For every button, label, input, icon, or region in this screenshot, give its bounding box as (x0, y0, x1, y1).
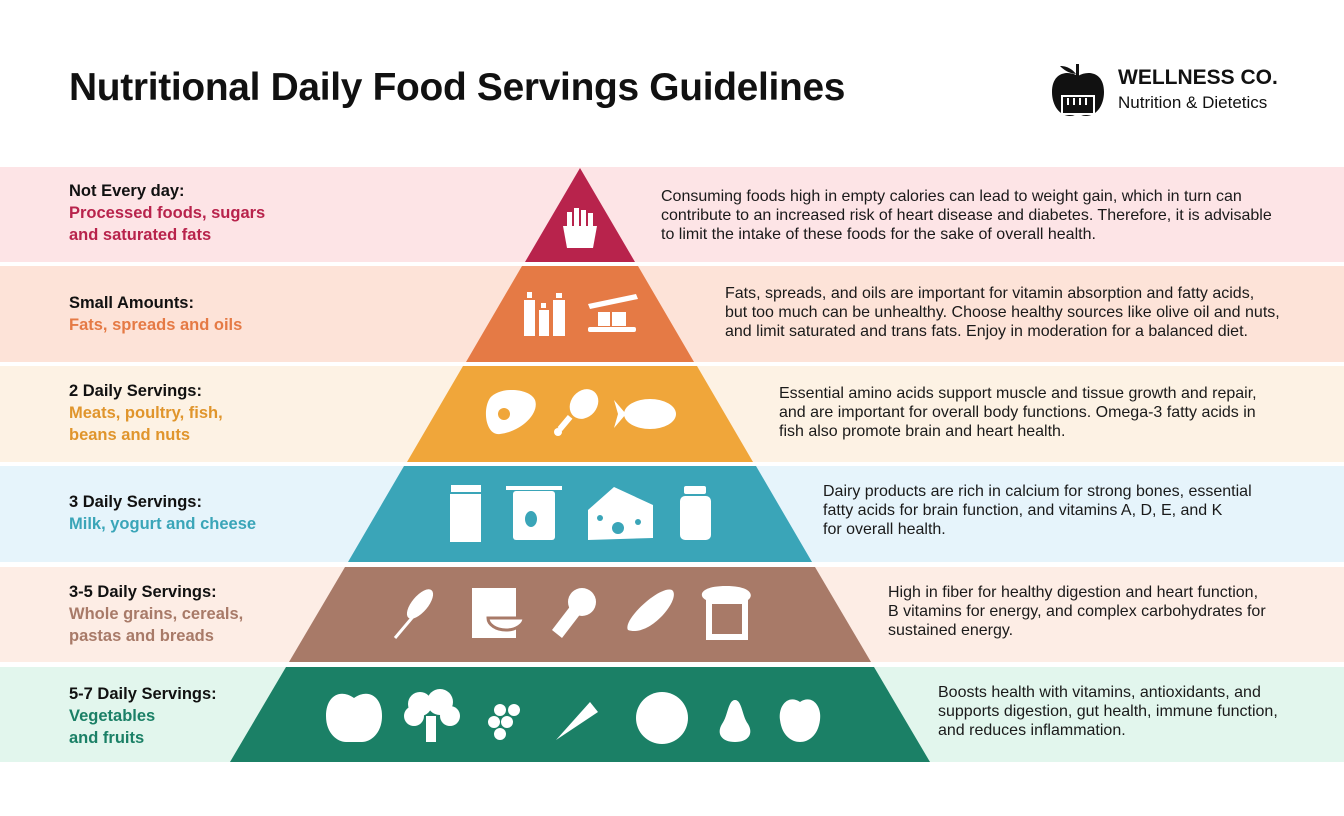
label: 5-7 daily servings: 5-7 Daily Servings: (69, 685, 217, 703)
label: not every day: Processed foods, sugars (69, 204, 265, 222)
icon: fries (563, 208, 597, 248)
icon: grapes (488, 704, 520, 740)
desc: fats: Fats, spreads, and oils are important for vitamin absorption and fatty acids, (725, 285, 1254, 302)
desc: fats: but too much can be unhealthy. Choose healthy sources like olive oil and nuts, (725, 304, 1280, 321)
desc: processed: contribute to an increased risk of heart disease and diabetes. Therefore, it is advisable (661, 207, 1272, 224)
desc: dairy: fatty acids for brain function, and vitamins A, D, E, and K (823, 502, 1222, 519)
label: 3 daily servings (69, 493, 256, 533)
desc: meats (779, 385, 1257, 440)
desc: dairy (823, 483, 1252, 538)
desc: vegetables: and reduces inflammation. (938, 722, 1126, 739)
icon: baguette (627, 590, 674, 631)
label: 3 daily servings: Milk, yogurt and cheese (69, 515, 256, 533)
tier 3: meats (407, 366, 753, 462)
icon: cheese (588, 487, 653, 540)
label: 2 daily servings: beans and nuts (69, 426, 190, 444)
label: 3 daily servings: 3 Daily Servings: (69, 493, 202, 511)
label: 2 daily servings: 2 Daily Servings: (69, 382, 202, 400)
label: 3-5 daily servings: pastas and breads (69, 627, 214, 645)
icon: cereal box (472, 588, 524, 638)
logo: WELLNESS CO. (1118, 66, 1278, 89)
tier 4: dairy (348, 466, 812, 562)
icon: carrot (556, 702, 598, 740)
band backgrounds (0, 167, 1344, 262)
title: Nutritional Daily Food Servings Guidelines (69, 66, 845, 109)
icon: steak (486, 390, 536, 434)
icon: pasta (552, 588, 596, 638)
desc: grains: B vitamins for energy, and complex carbohydrates for (888, 603, 1266, 620)
desc: vegetables: Boosts health with vitamins, antioxidants, and (938, 684, 1261, 701)
label: 3-5 daily servings (69, 583, 243, 645)
label: small amounts: Small Amounts: (69, 294, 194, 312)
desc: dairy: Dairy products are rich in calcium for strong bones, essential (823, 483, 1252, 500)
icon: butter dish (588, 294, 638, 332)
label: 5-7 daily servings: Vegetables (69, 707, 155, 725)
label: 3-5 daily servings: Whole grains, cereals, (69, 605, 243, 623)
label: small amounts (69, 294, 242, 334)
label: not every day: and saturated fats (69, 226, 211, 244)
icon: pepper (780, 699, 820, 742)
icon: fish (614, 399, 676, 429)
icon: apple with tape (1052, 64, 1104, 116)
icon: apple (326, 694, 382, 742)
icon: pear (720, 700, 750, 742)
logo: Nutrition & Dietetics (1118, 93, 1267, 112)
desc: vegetables: supports digestion, gut health, immune function, (938, 703, 1278, 720)
label: small amounts: Fats, spreads and oils (69, 316, 242, 334)
label: 2 daily servings: Meats, poultry, fish, (69, 404, 223, 422)
label: not every day: Not Every day: (69, 182, 185, 200)
tier 5: grains (289, 567, 871, 662)
desc: processed: to limit the intake of these foods for the sake of overall health. (661, 226, 1096, 243)
icon: bottle (680, 486, 711, 540)
label: 5-7 daily servings (69, 685, 217, 747)
icon: broccoli (404, 689, 460, 742)
desc: grains: sustained energy. (888, 622, 1013, 639)
icon: tomato (636, 692, 688, 744)
logo (1052, 64, 1278, 116)
icon: yogurt (506, 486, 562, 540)
desc: fats: and limit saturated and trans fats. Enjoy in moderation for a balanced diet. (725, 323, 1248, 340)
desc: vegetables (938, 684, 1278, 739)
desc: processed: Consuming foods high in empty calories can lead to weight gain, which in turn can (661, 188, 1242, 205)
tier 6: vegetables & fruits (230, 667, 930, 762)
tier 2: fats (466, 266, 694, 362)
label: 2 daily servings (69, 382, 223, 444)
desc: meats: and are important for overall body functions. Omega-3 fatty acids in (779, 404, 1256, 421)
icon: milk carton (450, 485, 481, 542)
label: not every day (69, 182, 265, 244)
label: 5-7 daily servings: and fruits (69, 729, 144, 747)
icon: wheat (395, 585, 438, 638)
icon: drumstick (554, 383, 604, 436)
label: 3-5 daily servings: 3-5 Daily Servings: (69, 583, 217, 601)
desc: meats: Essential amino acids support muscle and tissue growth and repair, (779, 385, 1257, 402)
tier 1: processed foods (525, 168, 635, 262)
icon: toast (702, 586, 751, 640)
desc: meats: fish also promote brain and heart health. (779, 423, 1065, 440)
desc: dairy: for overall health. (823, 521, 946, 538)
desc: fats (725, 285, 1280, 340)
desc: processed (661, 188, 1272, 243)
desc: grains: High in fiber for healthy digestion and heart function, (888, 584, 1258, 601)
icon: bottles (524, 292, 565, 336)
desc: grains (888, 584, 1266, 639)
